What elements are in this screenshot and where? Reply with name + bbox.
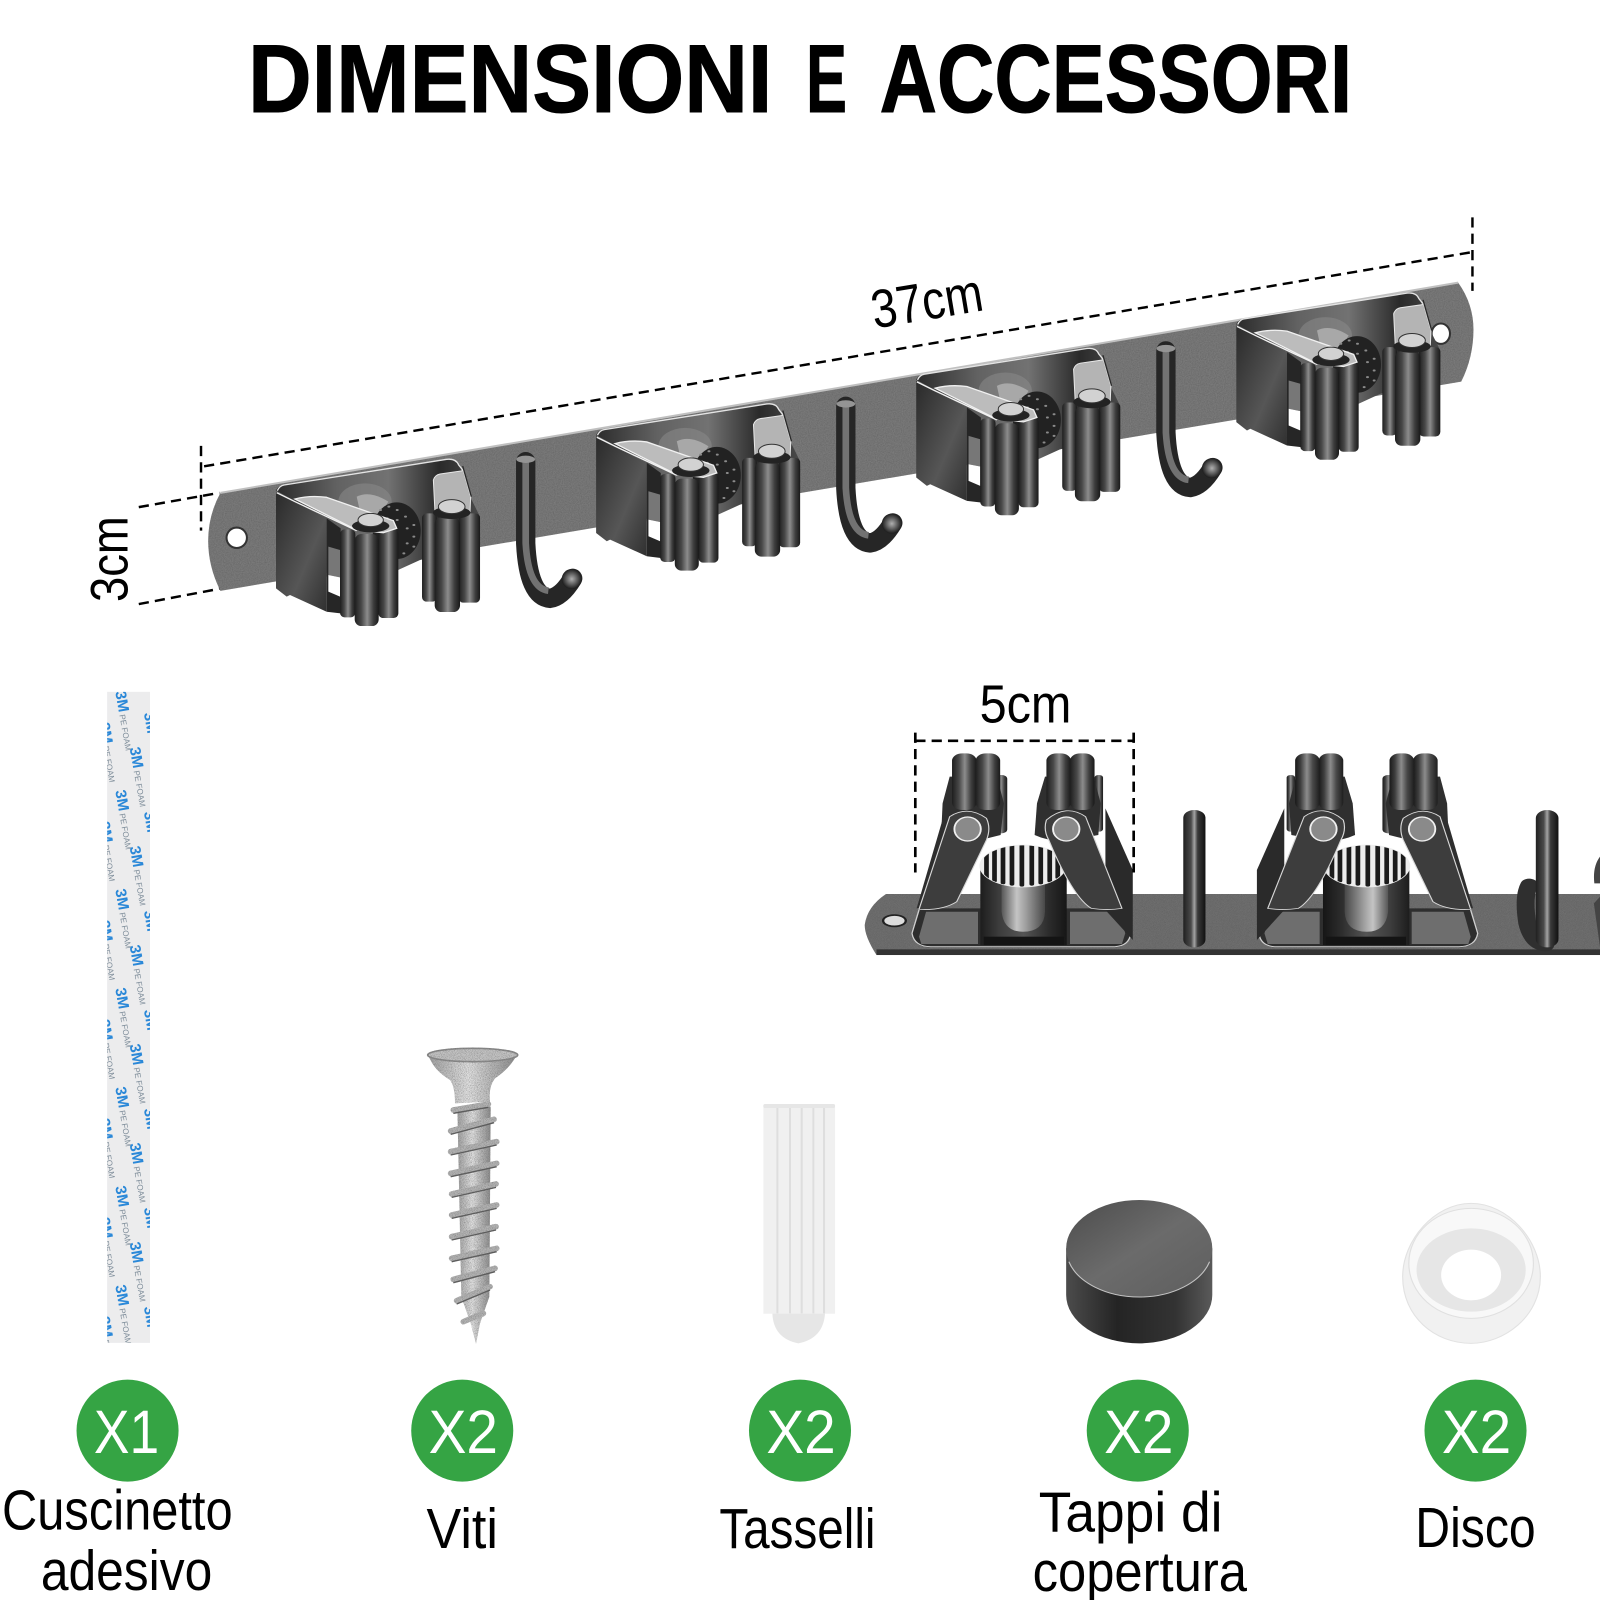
length label: 37cm <box>867 263 987 340</box>
height label: 3cm <box>81 516 140 602</box>
badge x2 tappi: X2 <box>1104 1398 1173 1466</box>
accessory: washer disc <box>1403 1203 1540 1343</box>
accessory: 3M adhesive strip: 3M <box>140 810 160 834</box>
badge x1 <box>77 1380 179 1482</box>
accessory: 3M adhesive strip: 3M <box>140 909 160 933</box>
accessory: 3M adhesive strip: 3M PE FOAM <box>111 888 139 950</box>
label: disco: Disco <box>1415 1496 1536 1559</box>
badge x2 disco <box>1424 1380 1527 1482</box>
label: cuscinetto adesivo: Cuscinetto <box>2 1479 233 1542</box>
label: tappi di copertura <box>1033 1481 1248 1600</box>
rail plate <box>208 283 1473 591</box>
front hook 1 <box>1183 810 1205 947</box>
front rail hole <box>883 915 906 926</box>
mounting hole left <box>227 528 247 548</box>
clamp pair 1 <box>276 459 480 626</box>
accessory: 3M adhesive strip: 3M PE FOAM <box>126 746 153 808</box>
accessory: 3M adhesive strip: 3M <box>140 1107 160 1131</box>
accessory: 3M adhesive strip: 3M PE FOAM <box>111 1085 139 1148</box>
accessory: 3M adhesive strip: 3M PE FOAM <box>126 1043 153 1105</box>
clamp pair 3 <box>916 348 1120 515</box>
front rail <box>865 894 1600 955</box>
label: tasselli: Tasselli <box>719 1497 876 1560</box>
accessory: 3M adhesive strip: 3M <box>140 1206 160 1230</box>
accessory: 3M adhesive strip <box>107 692 150 1343</box>
accessory: 3M adhesive strip: 3M <box>140 711 160 735</box>
front clamp 1 <box>911 753 1133 947</box>
accessory: 3M adhesive strip: 3M PE FOAM <box>95 820 122 883</box>
accessory: 3M adhesive strip: 3M PE FOAM <box>95 1216 122 1279</box>
badge x2 tasselli <box>749 1380 851 1482</box>
hook 1 <box>516 456 582 598</box>
label: cuscinetto adesivo: adesivo <box>41 1539 212 1600</box>
title: E <box>806 24 847 133</box>
accessory: 3M adhesive strip: 3M PE FOAM <box>95 1315 122 1378</box>
dimension: length 37cm <box>201 217 1472 531</box>
accessory: 3M adhesive strip: 3M PE FOAM <box>111 789 139 851</box>
badge x2 viti <box>411 1380 513 1482</box>
front clamp 2 <box>1257 753 1479 947</box>
front rail bottom edge <box>877 949 1600 955</box>
accessory: 3M adhesive strip: 3M PE FOAM <box>111 690 139 752</box>
width dashed box <box>915 733 1134 872</box>
title: ACCESSORI <box>880 24 1352 133</box>
accessory: 3M adhesive strip: 3M <box>140 1008 160 1032</box>
badge x2 viti: X2 <box>429 1398 498 1466</box>
accessory: screw <box>428 1048 518 1344</box>
front hook 2 <box>1526 810 1558 947</box>
accessory: 3M adhesive strip: 3M PE FOAM <box>95 919 122 982</box>
cropped third clamp <box>1594 857 1600 947</box>
dimension: height 3cm <box>81 493 219 604</box>
badge x2 tasselli: X2 <box>766 1398 836 1466</box>
rail top edge highlight <box>220 283 1458 493</box>
title <box>248 24 1352 133</box>
accessory: 3M adhesive strip: 3M PE FOAM <box>95 721 122 784</box>
hook 3 <box>1157 345 1222 488</box>
hook 2 <box>836 400 902 543</box>
accessory: 3M adhesive strip: 3M PE FOAM <box>126 1142 153 1204</box>
badge x2 disco: X2 <box>1442 1398 1511 1466</box>
mounting hole right <box>1432 323 1450 344</box>
label: cuscinetto adesivo <box>2 1479 233 1600</box>
label: viti: Viti <box>427 1497 498 1560</box>
accessory: 3M adhesive strip: 3M PE FOAM <box>126 944 153 1006</box>
clamp pair 2 <box>596 404 800 571</box>
clamp pair 4 <box>1236 293 1440 460</box>
width label: 5cm <box>980 674 1071 734</box>
badge x2 tappi <box>1087 1380 1189 1482</box>
accessory: 3M adhesive strip: 3M <box>140 1305 160 1329</box>
title: DIMENSIONI <box>248 24 772 133</box>
accessory: 3M adhesive strip: 3M PE FOAM <box>111 987 139 1049</box>
product front view: rack with clamps, partially cropped <box>865 674 1600 955</box>
accessory: 3M adhesive strip: 3M PE FOAM <box>126 845 153 907</box>
label: tappi di copertura: Tappi di <box>1039 1481 1222 1544</box>
accessory: wall plug <box>763 1104 835 1343</box>
accessory: 3M adhesive strip: 3M PE FOAM <box>126 1241 153 1303</box>
accessory: 3M adhesive strip: 3M PE FOAM <box>95 1018 122 1081</box>
product top view: rack with four clamps and three hooks <box>208 283 1473 626</box>
accessory: 3M adhesive strip: 3M PE FOAM <box>95 1117 122 1180</box>
accessory: 3M adhesive strip: 3M PE FOAM <box>111 1184 139 1247</box>
accessory: cover cap <box>1066 1200 1212 1343</box>
accessory: 3M adhesive strip: 3M PE FOAM <box>111 1283 139 1346</box>
badge x1: X1 <box>94 1398 159 1466</box>
